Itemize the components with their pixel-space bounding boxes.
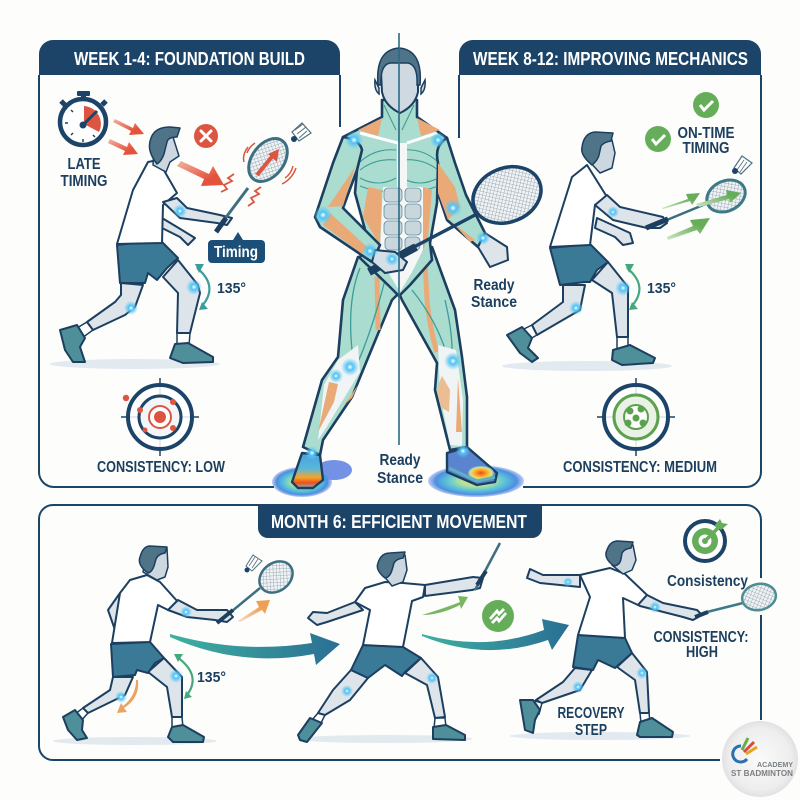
angle: 135: 135° xyxy=(647,280,676,297)
knee and shin xyxy=(318,345,463,446)
callout: timing: Timing xyxy=(214,244,258,261)
label: ready stance right: Ready xyxy=(474,277,515,294)
label: consistency low: CONSISTENCY: LOW xyxy=(97,459,225,476)
label: recovery step: RECOVERY xyxy=(558,705,625,722)
icon: shuttlecock xyxy=(244,555,262,572)
center anatomy figure xyxy=(272,33,550,497)
arrows: late red xyxy=(108,119,224,186)
center line xyxy=(398,33,400,445)
angle: 135 xyxy=(625,264,676,310)
chest lines xyxy=(360,105,438,191)
arrow: swoosh two xyxy=(422,619,569,650)
panel: week 1-4 xyxy=(39,40,340,487)
logo text xyxy=(731,762,793,778)
icon: recycle xyxy=(482,600,514,632)
icon: check top xyxy=(693,92,719,118)
angle: 135 xyxy=(174,654,226,699)
heading: week 1-4: WEEK 1-4: FOUNDATION BUILD xyxy=(74,48,305,69)
label: late timing xyxy=(60,156,108,190)
heading: week 8-12: WEEK 8-12: IMPROVING MECHANICS xyxy=(473,48,748,69)
icon: check left xyxy=(645,126,671,152)
heading: week 1-4 xyxy=(39,40,340,75)
label: late timing: TIMING xyxy=(60,173,108,190)
shoulder orange xyxy=(358,118,440,136)
hands xyxy=(372,250,407,273)
label: consistency high: HIGH xyxy=(686,644,718,661)
label: on-time timing xyxy=(678,125,735,157)
joint markers xyxy=(305,131,490,460)
left arm xyxy=(315,137,380,262)
heading: month 6 xyxy=(258,505,542,538)
label: ready stance bottom: Stance xyxy=(377,470,423,487)
head xyxy=(375,48,425,113)
label: late timing: LATE xyxy=(68,156,101,173)
angle: 135: 135° xyxy=(217,280,246,297)
icon: target medium xyxy=(597,378,675,456)
label: on-time timing: ON-TIME xyxy=(678,125,735,142)
thigh muscles xyxy=(351,263,452,362)
angle: 135 xyxy=(195,264,246,310)
arrow: green up xyxy=(422,596,468,615)
logo text: ACADEMY xyxy=(757,762,793,769)
label: ready stance bottom: Ready xyxy=(380,452,421,469)
icon: stopwatch xyxy=(60,91,106,145)
icon: x badge xyxy=(194,124,218,148)
logo text: ST BADMINTON xyxy=(731,769,793,778)
heading: week 8-12 xyxy=(459,40,761,75)
angle: 135: 135° xyxy=(197,669,226,686)
shoes xyxy=(292,447,497,488)
label: recovery step: STEP xyxy=(575,722,607,739)
label: ready stance right: Stance xyxy=(471,294,517,311)
icon: logo mark xyxy=(733,738,757,762)
label: on-time timing: TIMING xyxy=(682,140,730,157)
logo xyxy=(722,721,798,797)
player: recovery xyxy=(510,541,778,740)
racket xyxy=(369,157,550,272)
label: consistency: Consistency xyxy=(667,573,748,590)
label: ready stance bottom xyxy=(377,452,423,487)
legs xyxy=(303,247,467,455)
arrow: swoosh one xyxy=(170,633,340,665)
side orange xyxy=(363,187,432,253)
heading: month 6: MONTH 6: EFFICIENT MOVEMENT xyxy=(271,512,527,532)
panel: week 8-12 xyxy=(459,40,761,487)
player: swing xyxy=(53,546,299,745)
arrow: orange up xyxy=(238,600,270,622)
callout: timing xyxy=(208,232,265,263)
label: consistency high: CONSISTENCY: xyxy=(654,629,748,646)
icon: target low xyxy=(121,378,199,456)
panel: month 6 xyxy=(39,505,778,760)
abs xyxy=(380,143,423,292)
torso xyxy=(343,100,447,296)
right arm xyxy=(437,138,485,247)
icon: shuttlecock xyxy=(291,123,311,142)
label: ready stance right xyxy=(471,277,517,311)
label: consistency high xyxy=(654,629,748,661)
arrows: on-time green xyxy=(662,190,741,240)
foot pressure maps xyxy=(272,460,524,497)
player: late timing xyxy=(50,127,296,369)
arrow: orange down xyxy=(117,680,138,713)
player: on-time timing xyxy=(502,132,750,371)
icon: shuttlecock xyxy=(732,156,752,174)
player: lunge xyxy=(297,543,500,743)
icon: target high xyxy=(685,519,728,561)
label: consistency medium: CONSISTENCY: MEDIUM xyxy=(563,459,717,476)
label: recovery step xyxy=(558,705,625,739)
